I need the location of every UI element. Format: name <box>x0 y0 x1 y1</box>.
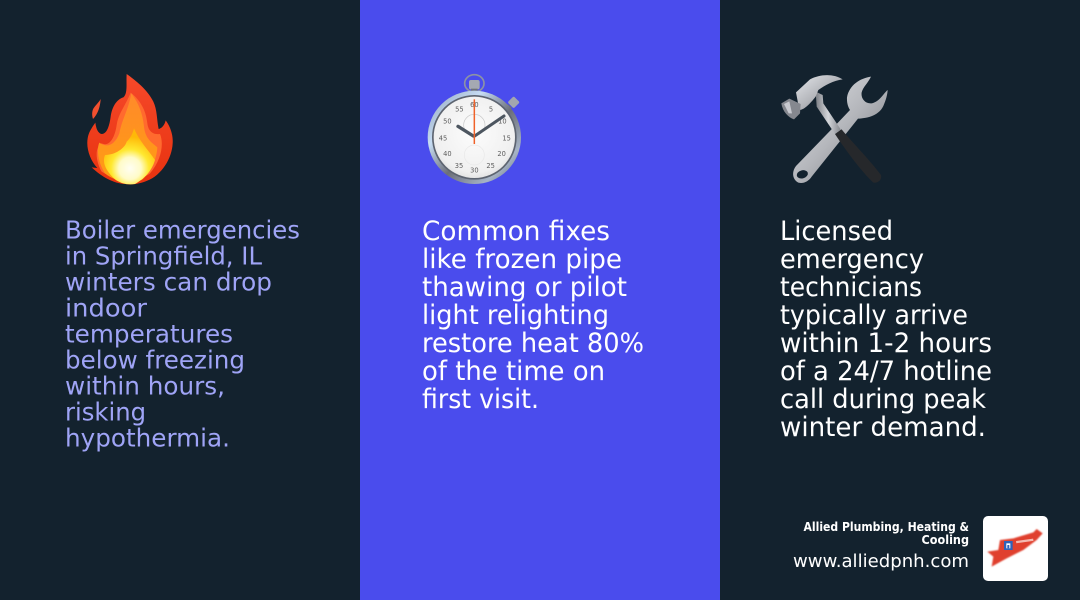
brand name: Allied Plumbing, Heating & <box>804 520 969 534</box>
text block: left: risking <box>65 398 146 426</box>
icon: stopwatch: 15 <box>502 134 511 142</box>
icon: stopwatch: 40 <box>443 150 452 158</box>
icon: stopwatch: 20 <box>497 150 506 158</box>
text block: centre: like frozen pipe <box>422 244 622 275</box>
text block: right <box>780 216 992 443</box>
icon: stopwatch: 10 <box>498 118 507 126</box>
website url: www.alliedpnh.com <box>793 552 969 572</box>
text block: centre <box>422 216 644 415</box>
text block: left: temperatures <box>65 320 233 348</box>
text block: right: technicians <box>780 272 922 303</box>
icon: stopwatch: 30 <box>470 167 479 175</box>
icon: stopwatch <box>428 75 521 184</box>
icon: fire <box>87 74 173 184</box>
icon: hammer and wrench <box>781 75 888 183</box>
logo <box>983 516 1048 581</box>
icon: stopwatch: 55 <box>455 106 464 114</box>
panel: right background <box>720 0 1080 600</box>
brand name: Cooling <box>922 533 969 547</box>
icon: stopwatch: 50 <box>443 118 452 126</box>
text block: centre: of the time on <box>422 356 605 387</box>
text block: left: hypothermia. <box>65 424 230 452</box>
icon: stopwatch: 25 <box>486 162 495 170</box>
text block: right: typically arrive <box>780 300 968 331</box>
text block: centre: light relighting <box>422 300 609 331</box>
panel: centre background <box>360 0 720 600</box>
icon: stopwatch: 45 <box>439 134 447 142</box>
text block: left: Boiler emergencies <box>65 216 300 244</box>
text block: left: below freezing <box>65 346 245 374</box>
text block: left <box>65 216 300 452</box>
text block: right: call during peak <box>780 384 987 415</box>
text block: left: winters can drop <box>65 268 272 296</box>
icon: stopwatch: 35 <box>455 162 463 170</box>
text block: centre: Common fixes <box>422 216 610 247</box>
text block: left: within hours, <box>65 372 225 400</box>
brand name <box>804 520 969 547</box>
text block: centre: restore heat 80% <box>422 328 644 359</box>
text block: right: winter demand. <box>780 412 986 443</box>
text block: right: emergency <box>780 244 924 275</box>
text block: centre: thawing or pilot <box>422 272 627 303</box>
text block: centre: first visit. <box>422 384 539 415</box>
text block: right: of a 24/7 hotline <box>780 356 992 387</box>
icon: stopwatch: 5 <box>489 106 493 114</box>
icon: stopwatch: 60 <box>470 101 479 109</box>
text block: right: Licensed <box>780 216 893 247</box>
text block: right: within 1-2 hours <box>780 328 992 359</box>
panel: left background <box>0 0 360 600</box>
text block: left: in Springfield, IL <box>65 242 262 270</box>
text block: left: indoor <box>65 294 148 322</box>
